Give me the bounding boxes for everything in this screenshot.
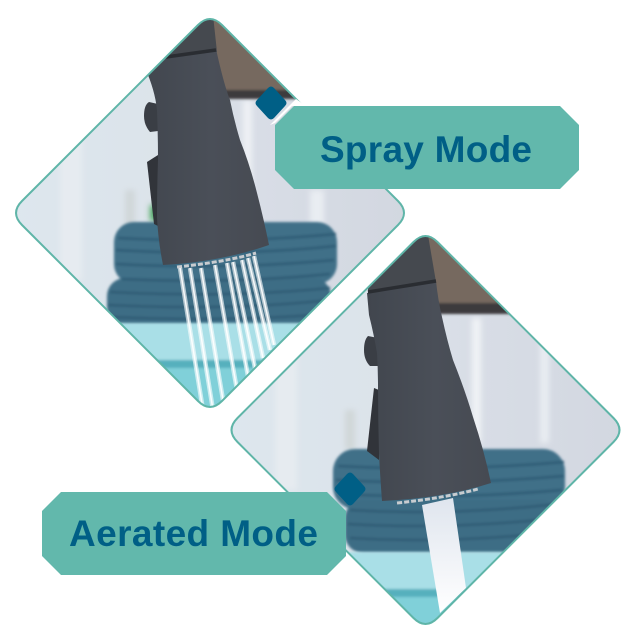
jets outer glow <box>180 256 274 410</box>
faucet neck <box>368 235 436 296</box>
label plate <box>275 106 579 189</box>
faucet side trigger <box>147 155 158 226</box>
label text: Aerated Mode <box>69 513 318 554</box>
aerated water stream <box>422 498 466 613</box>
faucet side button <box>144 102 158 132</box>
photo scene: aerated mode <box>224 228 627 633</box>
faucet side button <box>364 336 378 366</box>
folded light teal towels <box>348 550 504 623</box>
label text: Spray Mode <box>320 129 532 170</box>
folded dark teal towels <box>107 222 337 325</box>
icon: pull-down faucet sprayer head <box>140 15 269 267</box>
dark shelf above wall <box>428 238 510 316</box>
soft wall panels <box>60 90 324 280</box>
white notch beside spray label <box>270 99 306 125</box>
spray nozzle ring <box>177 253 256 267</box>
blurred wall background <box>232 289 618 553</box>
panel: aerated mode photo <box>224 228 627 633</box>
label: spray mode <box>275 106 579 189</box>
label: aerated mode <box>42 492 346 575</box>
aerated panel teal border <box>232 236 620 624</box>
folded dark teal towels <box>333 449 565 553</box>
spray water jets <box>180 256 274 410</box>
aerator nozzle ring <box>397 489 478 503</box>
faucet seam <box>166 50 216 57</box>
label plate <box>42 492 346 575</box>
faucet neck <box>170 20 217 55</box>
icon: pull-down faucet sprayer head <box>364 235 491 503</box>
blurred wall background <box>17 76 403 309</box>
faucet body <box>140 49 269 265</box>
faucet seam <box>368 281 436 292</box>
dark shelf above wall <box>214 20 296 101</box>
soft wall panels <box>275 318 549 490</box>
photo scene: spray mode <box>9 10 411 414</box>
faucet body <box>367 281 491 501</box>
panel: spray mode photo <box>9 10 411 414</box>
icon: spray label diamond <box>256 86 286 120</box>
folded light teal towels <box>120 321 300 406</box>
jets core <box>180 256 274 410</box>
spray panel teal border <box>16 19 404 407</box>
faucet side trigger <box>367 388 379 460</box>
icon: aerated label diamond <box>334 472 366 506</box>
